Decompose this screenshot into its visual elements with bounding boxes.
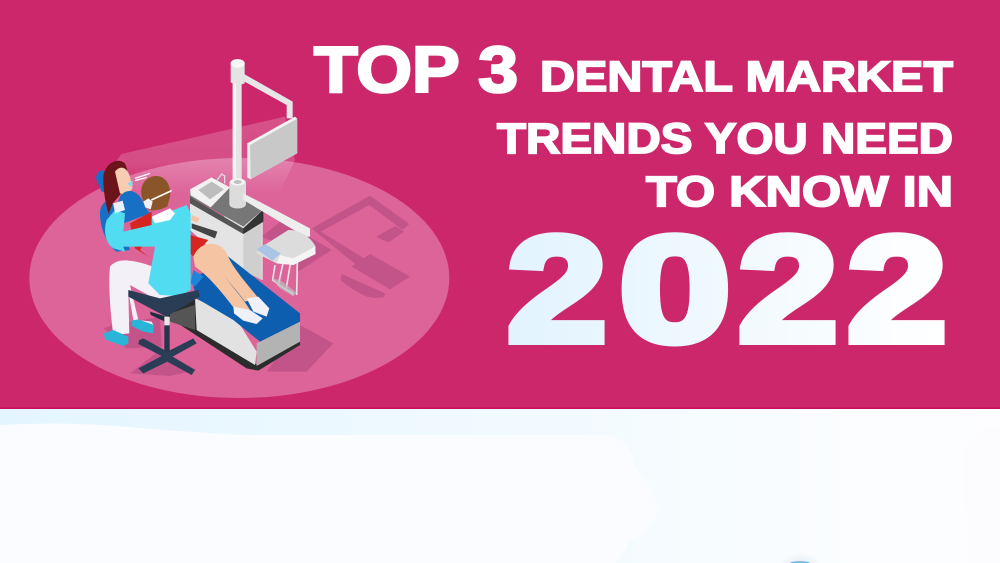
panel: pale lower section [0,408,1000,563]
title: year 2022: 2 [507,205,607,373]
title: TOP 3: TOP 3 [314,33,518,106]
dental chair base and seat [155,257,300,371]
panel: pink header banner [0,0,1000,409]
stool [128,290,200,375]
title: Top 3 Dental Market [314,33,953,216]
dental lamp arm and panel [231,59,297,183]
instrument cabinet with sink [190,174,263,280]
title: year 2022 [507,205,947,373]
spotlight ellipse floor [29,158,449,398]
dentist [104,176,217,346]
title: TRENDS YOU NEED: TRENDS YOU NEED [497,115,953,163]
title: year 2022: 2 [738,205,838,373]
illustration: dental chair scene [29,59,449,398]
instrument tray and arm [243,193,316,296]
title: TO KNOW IN: TO KNOW IN [646,168,953,216]
title: DENTAL MARKET: DENTAL MARKET [540,53,953,101]
title: year 2022: 0 [619,205,731,373]
light beam [98,117,295,197]
patient [96,161,269,324]
title: year 2022: 2 [847,205,947,373]
equipment shadow on floor [103,196,410,376]
